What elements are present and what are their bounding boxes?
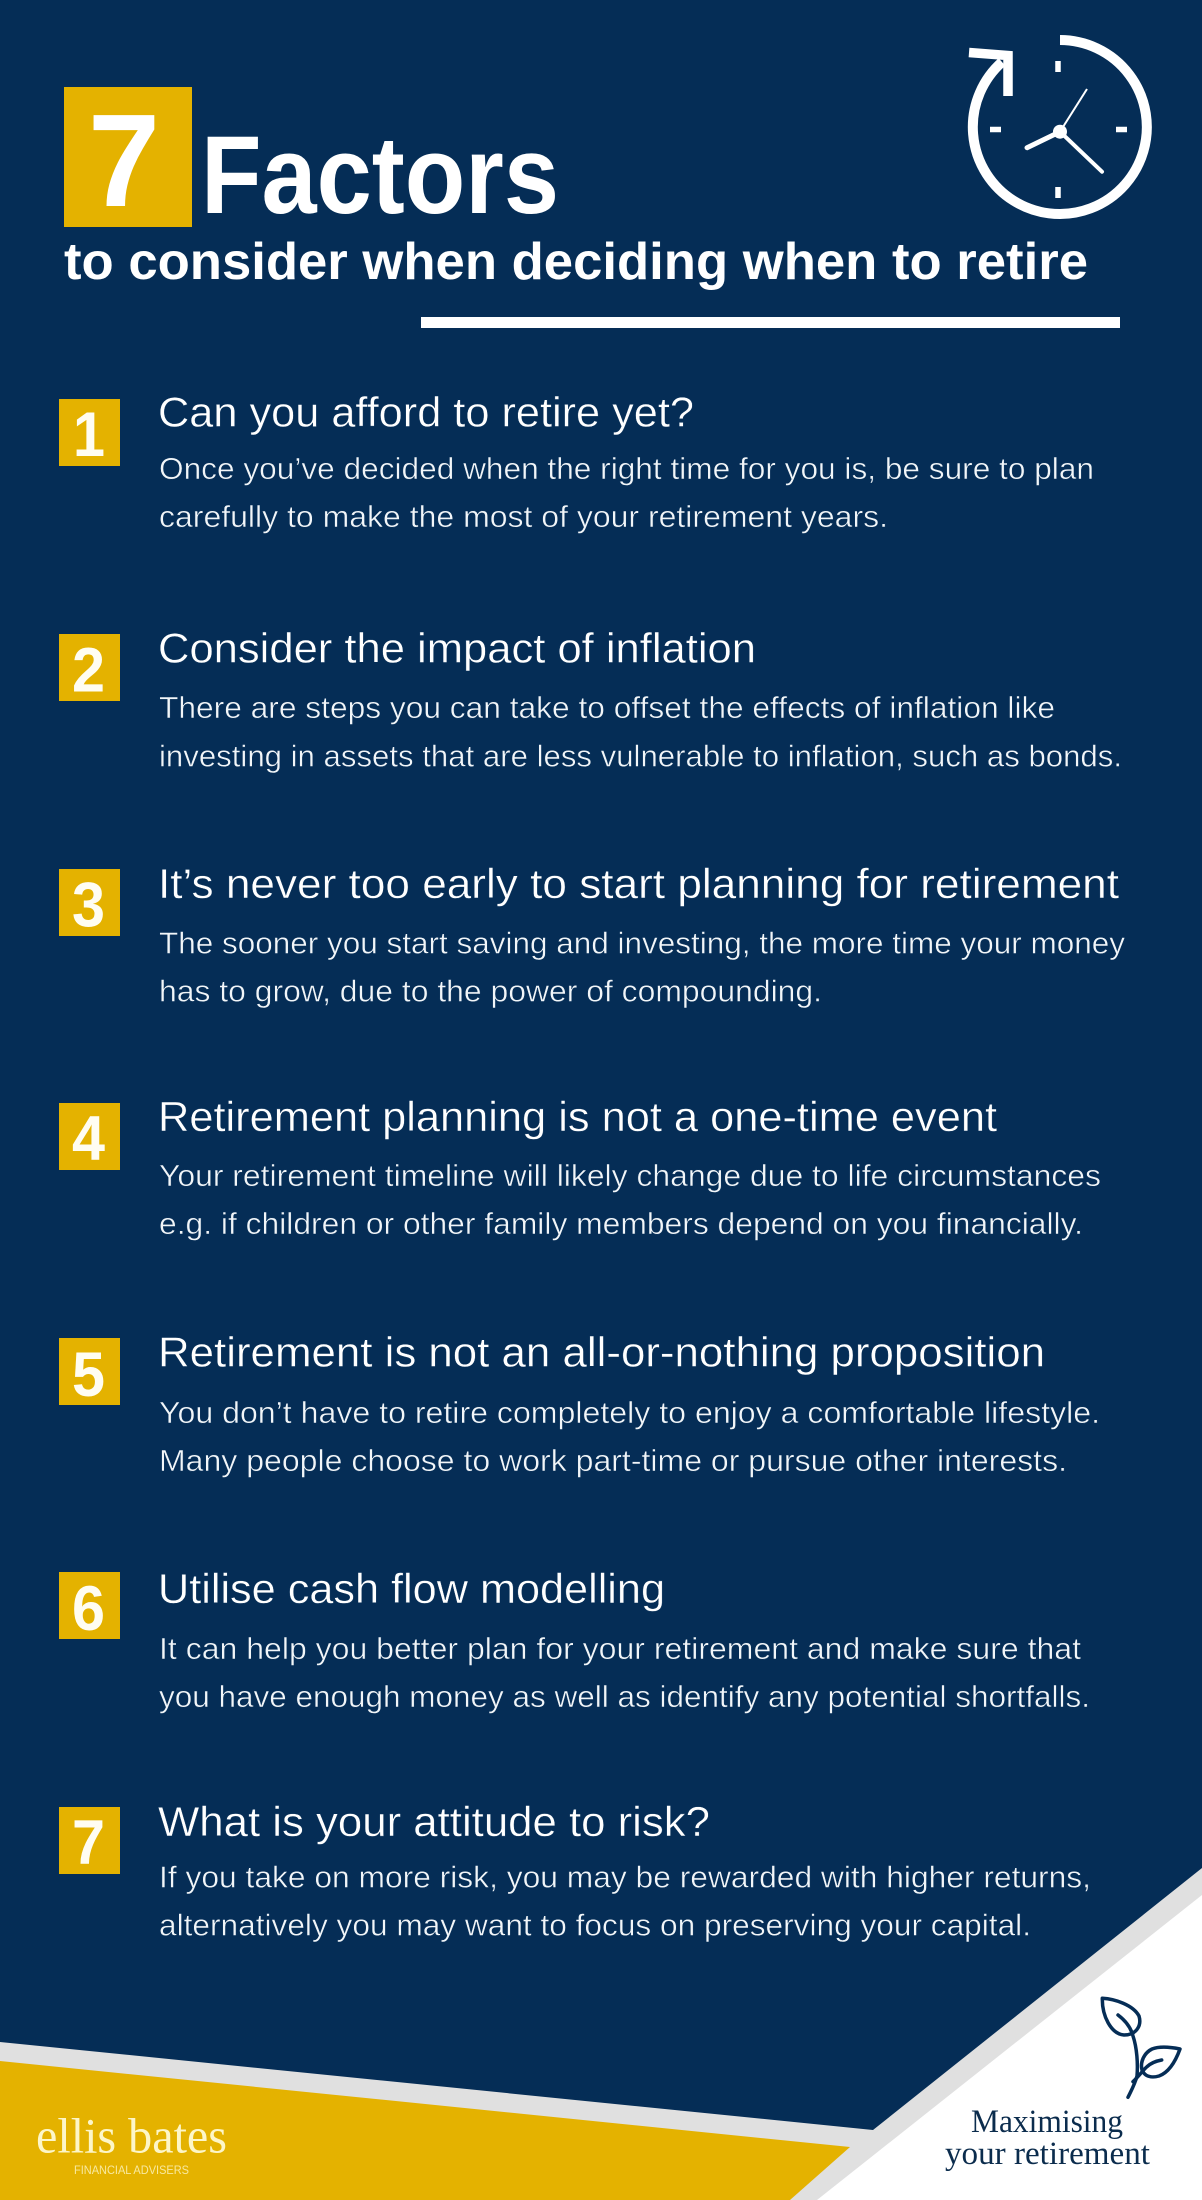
item 4: 4: [72, 1104, 105, 1174]
item 2: 2: [72, 636, 105, 706]
tagline: [945, 2104, 1150, 2172]
item 6: [59, 1565, 1090, 1714]
item 4: Retirement planning is not a one-time event: [158, 1093, 997, 1140]
item 5: 5: [72, 1340, 105, 1410]
item 1: Once you’ve decided when the right time for you is, be sure to plan: [159, 451, 1094, 486]
item 6: It can help you better plan for your retirement and make sure that: [159, 1631, 1081, 1666]
item 2: There are steps you can take to offset the effects of inflation like: [159, 690, 1055, 725]
item 3: It’s never too early to start planning for retirement: [158, 860, 1119, 907]
item 7: If you take on more risk, you may be rewarded with higher returns,: [159, 1860, 1091, 1894]
item 5: Many people choose to work part-time or pursue other interests.: [159, 1443, 1067, 1478]
item 6: Utilise cash flow modelling: [158, 1565, 665, 1612]
footer: white corner: [817, 1895, 1202, 2200]
item 3: has to grow, due to the power of compounding.: [159, 974, 822, 1008]
title: to consider when deciding when to retire: [64, 233, 1088, 291]
item 7: [59, 1798, 1091, 1942]
item 3: 3: [72, 870, 105, 940]
item 1: Can you afford to retire yet?: [158, 388, 694, 436]
item 5: Retirement is not an all-or-nothing proposition: [158, 1328, 1045, 1376]
item 1: 1: [73, 400, 105, 470]
footer: grey band: [0, 1868, 1202, 2200]
title: 7: [88, 87, 160, 234]
tagline: your retirement: [945, 2136, 1150, 2172]
item 6: 6: [72, 1574, 105, 1644]
tagline: Maximising: [971, 2104, 1123, 2140]
item 1: [59, 388, 1094, 534]
logo: ellis bates: ellis bates: [36, 2108, 227, 2164]
item 4: [59, 1093, 1101, 1241]
item 7: What is your attitude to risk?: [158, 1798, 710, 1845]
logo: ellis bates: FINANCIAL ADVISERS: [74, 2163, 189, 2177]
title: [64, 87, 1088, 291]
item 2: Consider the impact of inflation: [158, 624, 756, 672]
icon: clock with arrow: [969, 40, 1147, 214]
item 3: [59, 860, 1125, 1008]
item 1: carefully to make the most of your retirement years.: [159, 499, 888, 534]
item 7: 7: [72, 1808, 105, 1878]
title: Factors: [201, 114, 559, 237]
icon: plant: [1102, 1998, 1180, 2097]
item 4: Your retirement timeline will likely change due to life circumstances: [159, 1158, 1101, 1193]
item 2: investing in assets that are less vulnerable to inflation, such as bonds.: [159, 738, 1122, 774]
item 5: You don’t have to retire completely to enjoy a comfortable lifestyle.: [159, 1395, 1100, 1430]
item 5: [59, 1328, 1100, 1478]
footer: yellow band: [0, 2061, 850, 2200]
item 4: e.g. if children or other family members depend on you financially.: [159, 1206, 1083, 1241]
item 2: [59, 624, 1122, 774]
item 7: alternatively you may want to focus on preserving your capital.: [159, 1908, 1031, 1942]
item 3: The sooner you start saving and investing, the more time your money: [159, 926, 1125, 960]
item 6: you have enough money as well as identify any potential shortfalls.: [159, 1679, 1090, 1714]
